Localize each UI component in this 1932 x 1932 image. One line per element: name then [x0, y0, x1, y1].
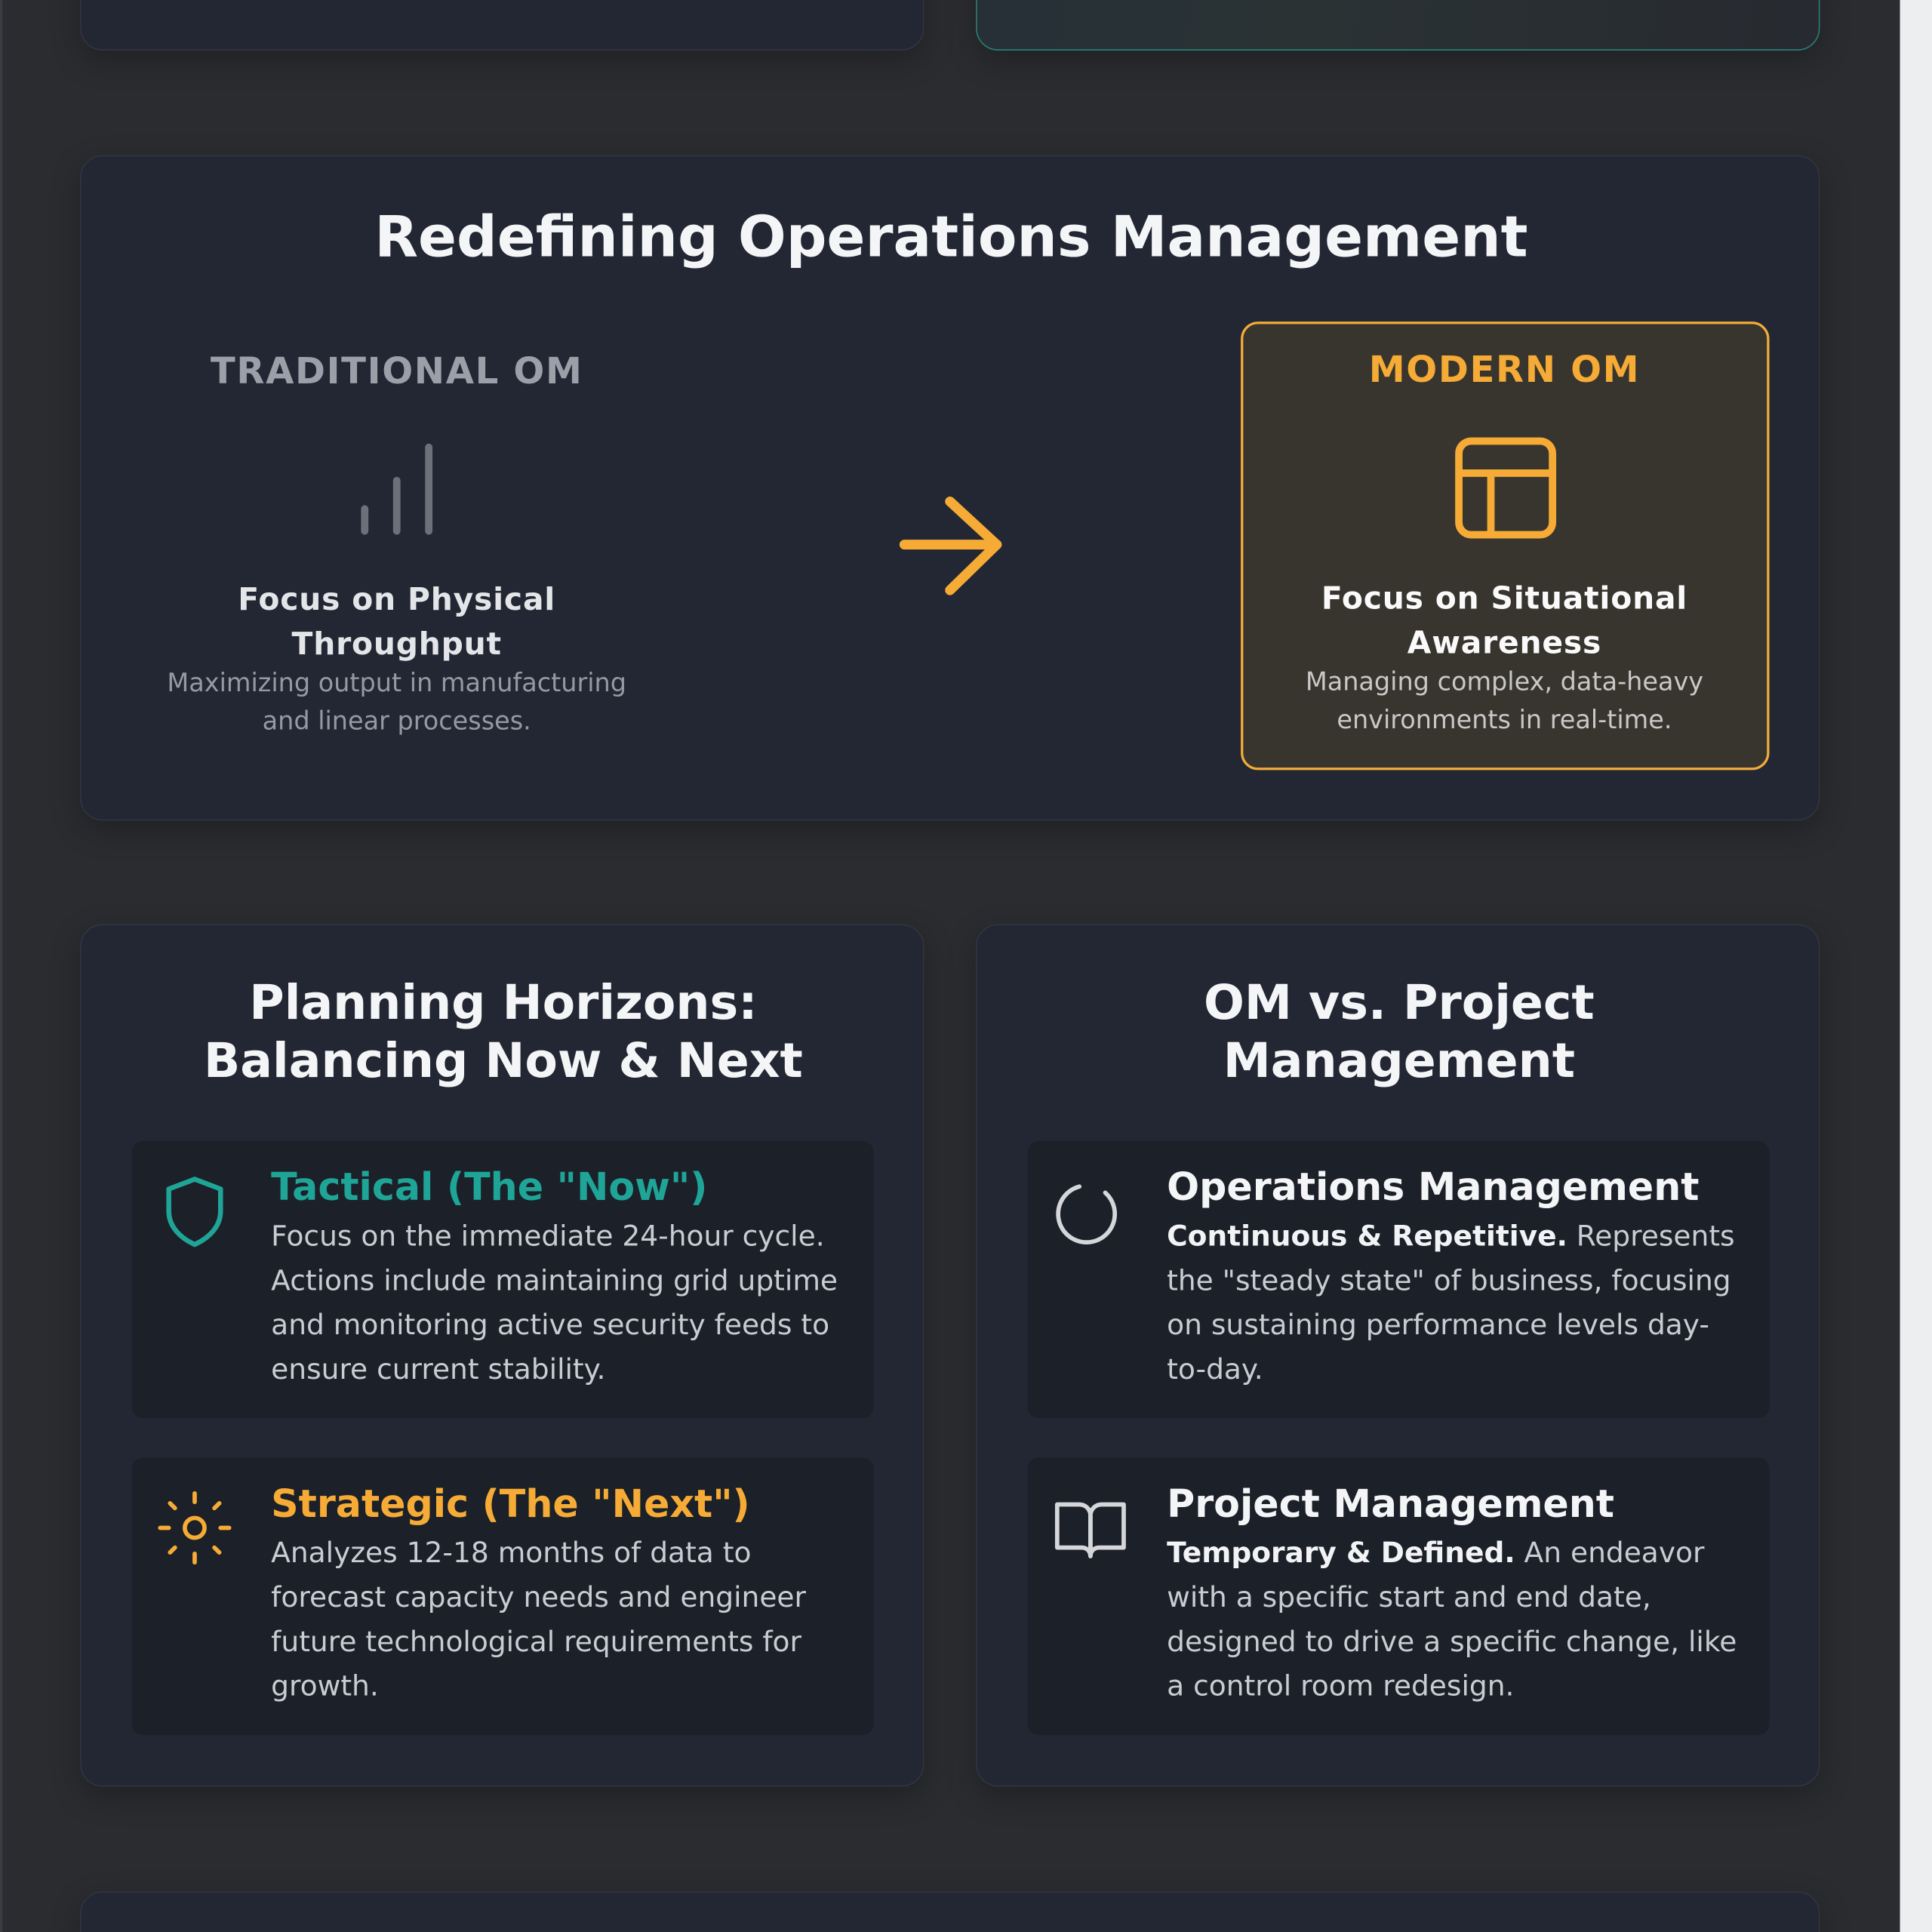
panel: top left (partial) — [80, 0, 924, 51]
label: traditional: TRADITIONAL OM — [211, 350, 583, 392]
body: to-day. — [1167, 1354, 1263, 1386]
arrow — [900, 497, 1002, 595]
text: physical throughput: Focus on Physical — [238, 582, 555, 617]
heading — [204, 976, 803, 1089]
card: strategic — [132, 1457, 874, 1735]
icon: bar signal — [361, 444, 433, 535]
text: physical throughput: Maximizing output in manufacturing — [167, 668, 626, 697]
body: forecast capacity needs and engineer — [271, 1582, 806, 1614]
body: designed to drive a specific change, like — [1167, 1626, 1737, 1659]
body — [271, 1221, 838, 1386]
card: operations management — [1028, 1141, 1769, 1418]
text: physical throughput: and linear processes. — [263, 706, 531, 736]
panel: top right (partial) — [976, 0, 1820, 51]
panel: bottom (partial) — [80, 1891, 1820, 1932]
panel: OM vs project management — [976, 924, 1820, 1786]
heading: OM vs. Project — [1204, 976, 1595, 1032]
heading: Planning Horizons: — [249, 976, 758, 1032]
body: Focus on the immediate 24-hour cycle. — [271, 1221, 825, 1253]
title: Project Management — [1167, 1482, 1614, 1527]
heading — [1204, 976, 1595, 1089]
body — [1167, 1538, 1737, 1703]
icon: shield — [166, 1177, 223, 1247]
icon: open book — [1055, 1502, 1126, 1558]
label: modern: MODERN OM — [1369, 349, 1640, 391]
body: Continuous & Repetitive. Represents — [1167, 1221, 1735, 1253]
text: situational awareness: environments in real-time. — [1337, 705, 1672, 734]
text: situational awareness: Awareness — [1407, 625, 1601, 660]
body: Analyzes 12-18 months of data to — [271, 1538, 751, 1570]
heading: Management — [1223, 1034, 1575, 1089]
column: traditional OM — [167, 350, 626, 736]
card: tactical — [132, 1141, 874, 1418]
title: Tactical (The "Now") — [271, 1165, 707, 1210]
heading: Balancing Now & Next — [204, 1034, 803, 1089]
icon: sun — [158, 1491, 231, 1564]
body: Actions include maintaining grid uptime — [271, 1266, 838, 1297]
body: future technological requirements for — [271, 1626, 801, 1659]
body — [271, 1538, 806, 1703]
body: on sustaining performance levels day- — [1167, 1310, 1709, 1342]
left edge line — [0, 0, 2, 1932]
card: project management — [1028, 1457, 1769, 1735]
body: growth. — [271, 1671, 379, 1703]
title: Operations Management — [1167, 1165, 1699, 1210]
body — [1167, 1221, 1735, 1386]
body: and monitoring active security feeds to — [271, 1310, 829, 1342]
title: Strategic (The "Next") — [271, 1482, 750, 1527]
body: ensure current stability. — [271, 1354, 605, 1386]
text: situational awareness — [1306, 580, 1703, 734]
card: modern OM — [1241, 321, 1769, 770]
strip: right edge — [1900, 0, 1932, 1932]
title: Redefining Operations Management — [374, 203, 1528, 270]
text: situational awareness: Managing complex, data-heavy — [1306, 666, 1703, 696]
text: physical throughput — [167, 582, 626, 736]
body: Temporary & Defined. An endeavor — [1167, 1538, 1704, 1570]
icon: layout dashboard — [1455, 438, 1556, 539]
body: the "steady state" of business, focusing — [1167, 1266, 1731, 1297]
body: with a specific start and end date, — [1167, 1582, 1651, 1614]
panel: redefining operations management — [80, 155, 1820, 820]
text: situational awareness: Focus on Situational — [1321, 580, 1687, 616]
icon: loader circle — [1056, 1184, 1117, 1244]
body: a control room redesign. — [1167, 1671, 1514, 1703]
text: physical throughput: Throughput — [292, 626, 502, 662]
panel: planning horizons — [80, 924, 924, 1786]
